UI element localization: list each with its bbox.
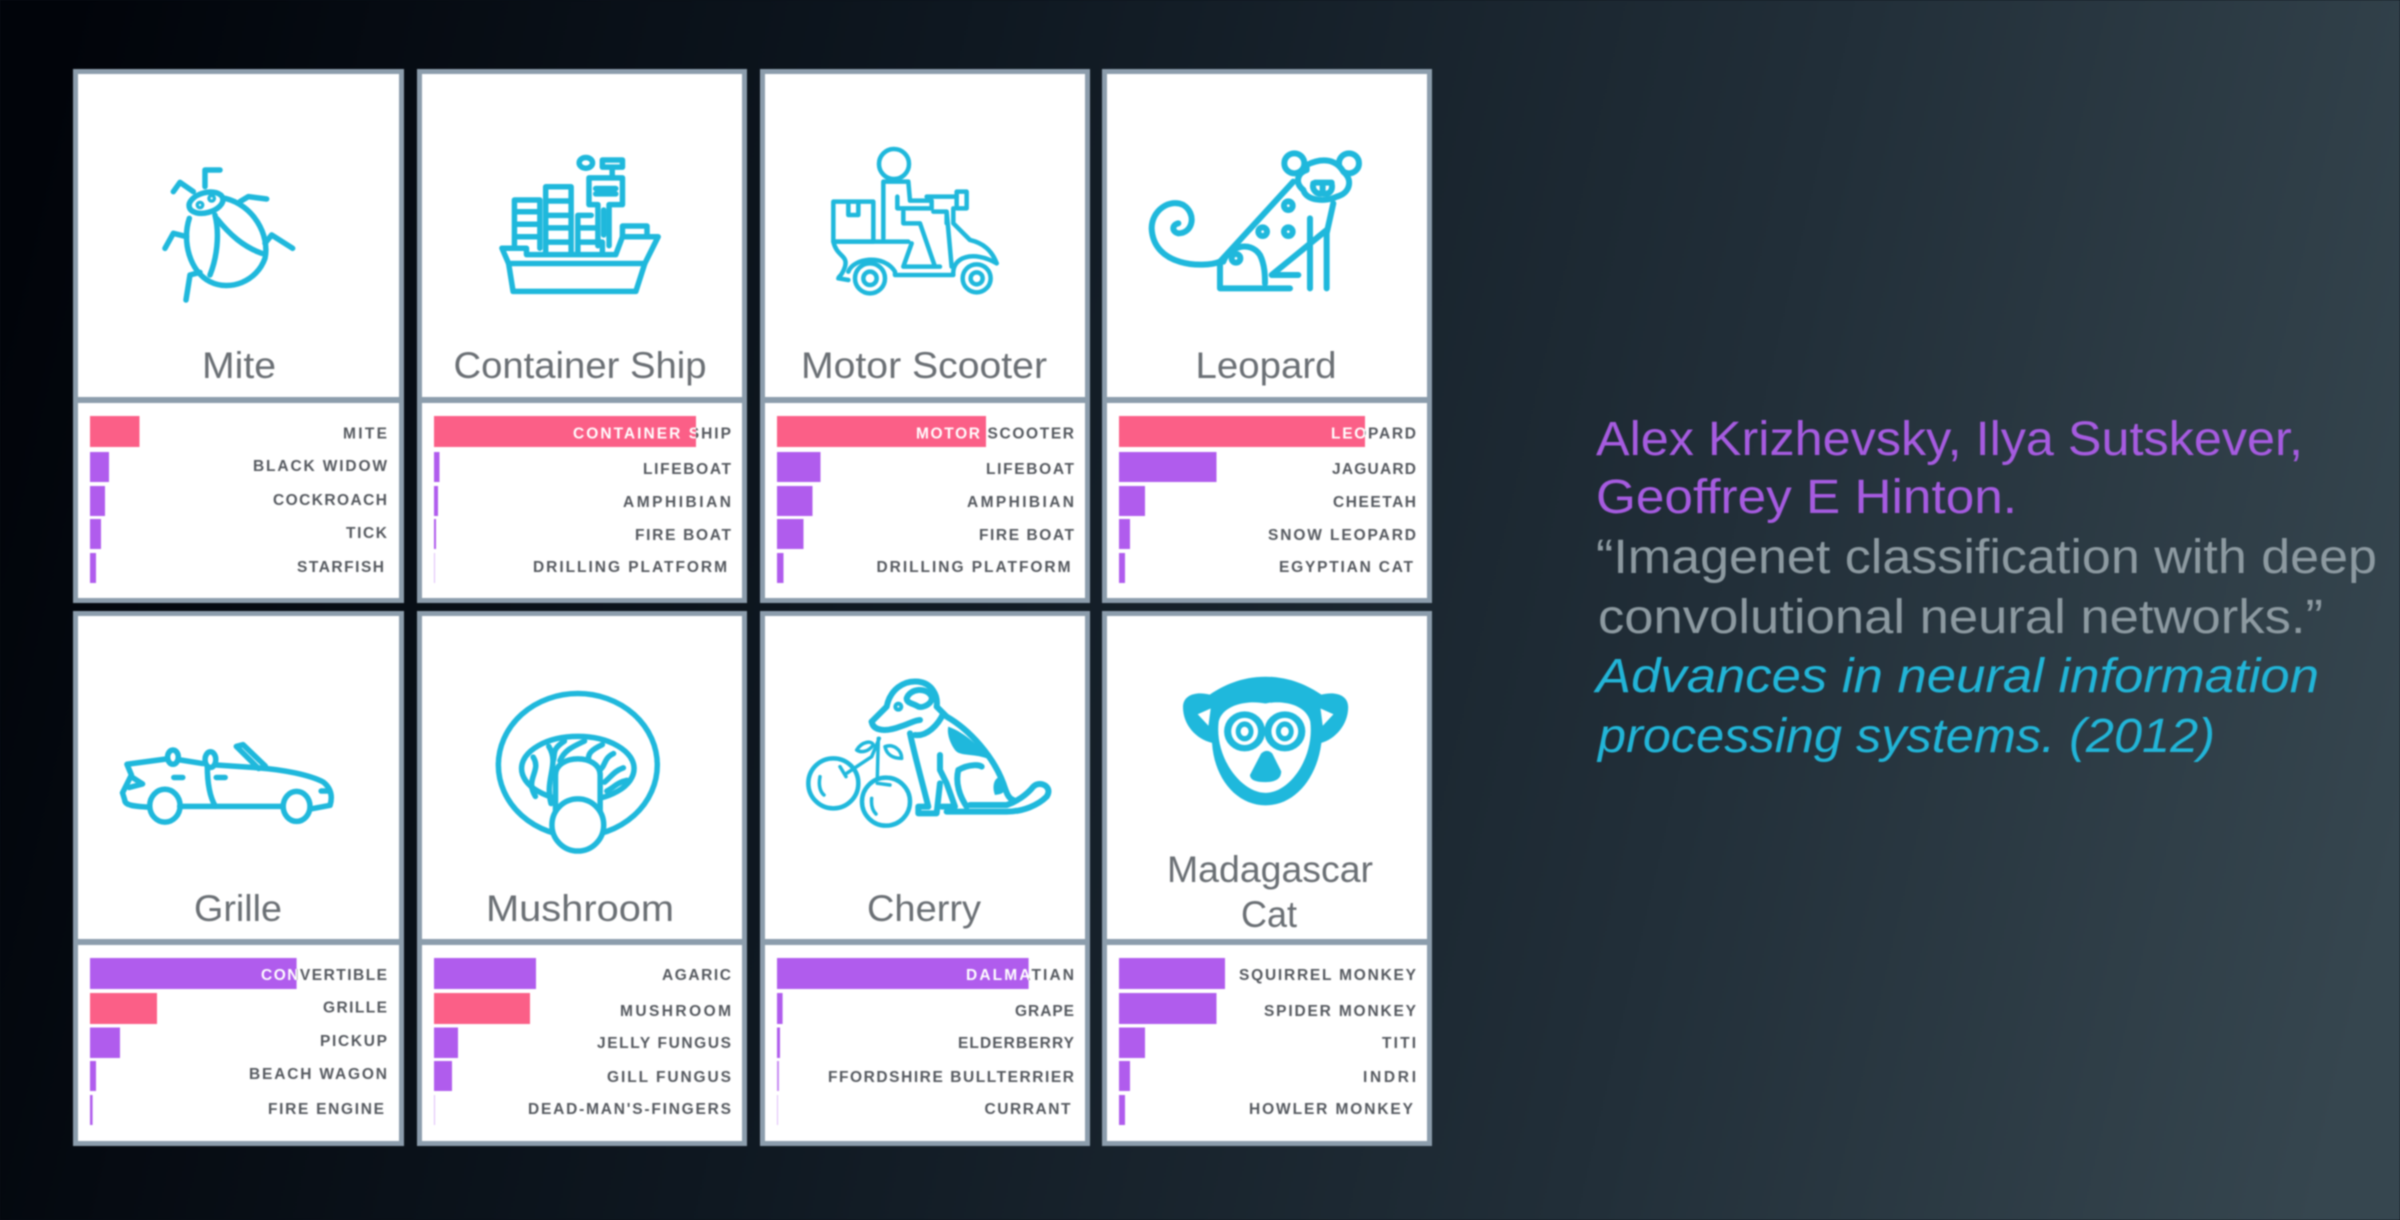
row: convertible: CONVERTIBLE (261, 967, 387, 984)
title: Container Ship: Container Ship (454, 345, 706, 386)
title: Leopard: Leopard (1196, 345, 1336, 386)
panel: Container Ship card (417, 69, 747, 603)
bar chart: Container Ship predictions (434, 416, 732, 583)
row: snow leopard (1119, 519, 1416, 549)
row: indri (1119, 1061, 1416, 1091)
row: lifeboat: LIFEBOAT (643, 461, 732, 478)
row: grape: GRAPE (1015, 1003, 1074, 1020)
row: amphibian (777, 486, 1074, 516)
row: tick: TICK (346, 525, 388, 542)
row: currant: CURRANT (984, 1101, 1071, 1118)
citation text block (1593, 413, 2377, 763)
row: beach wagon (90, 1061, 387, 1091)
card frame (760, 69, 1090, 603)
row: gill fungus: GILL FUNGUS (607, 1069, 731, 1086)
row: grille (90, 993, 387, 1024)
row: starfish (90, 553, 384, 583)
card frame (73, 611, 404, 1146)
title: Madagascar Cat: Cat (1241, 894, 1298, 935)
row: gill fungus (434, 1061, 731, 1091)
row: fire engine: FIRE ENGINE (268, 1101, 384, 1118)
bar chart: Mite predictions (90, 416, 388, 583)
row: jelly fungus: JELLY FUNGUS (597, 1035, 731, 1052)
row: cheetah (1119, 486, 1416, 516)
row: motor scooter: MOTOR SCOOTER (916, 426, 1074, 443)
row: beach wagon: BEACH WAGON (249, 1066, 387, 1083)
row: snow leopard: SNOW LEOPARD (1268, 527, 1416, 544)
row: squirrel monkey: SQUIRREL MONKEY (1239, 967, 1417, 984)
bar chart: Madagascar Cat predictions (1119, 958, 1417, 1125)
authors: Geoffrey E Hinton. (1596, 471, 2017, 524)
icon: dalmatian with cherries (808, 681, 1048, 826)
row: jelly fungus (434, 1028, 731, 1058)
card frame (1102, 69, 1432, 603)
row: cockroach: COCKROACH (273, 492, 387, 509)
row: egyptian cat: EGYPTIAN CAT (1279, 559, 1414, 576)
icon: container ship (502, 157, 658, 291)
row: lifeboat: LIFEBOAT (986, 461, 1075, 478)
title: Grille: Grille (194, 888, 282, 929)
row: elderberry: ELDERBERRY (958, 1035, 1075, 1052)
title: Madagascar Cat: Madagascar (1167, 849, 1373, 890)
row: mushroom: MUSHROOM (620, 1003, 731, 1020)
row: fire boat (777, 519, 1075, 549)
row: titi (1119, 1028, 1416, 1058)
row: howler monkey: HOWLER MONKEY (1249, 1101, 1414, 1118)
row: jaguard (1119, 452, 1416, 482)
publication venue: Advances in neural information (1593, 650, 2319, 703)
row: starfish: STARFISH (297, 559, 384, 576)
row: spider monkey: SPIDER MONKEY (1264, 1003, 1417, 1020)
row: fire boat: FIRE BOAT (979, 527, 1075, 544)
authors: Alex Krizhevsky, Ilya Sutskever, (1596, 413, 2303, 466)
row: mushroom (434, 993, 731, 1024)
panel: Motor Scooter card (760, 69, 1090, 603)
card frame (417, 69, 747, 603)
row: lifeboat (434, 452, 732, 482)
icon: mite (165, 170, 293, 300)
row: indri: INDRI (1363, 1069, 1416, 1086)
row: grille: GRILLE (323, 1000, 387, 1016)
paper title: “Imagenet classification with deep (1596, 531, 2377, 584)
bar chart: Mushroom predictions (434, 958, 731, 1125)
row: container ship: CONTAINER SHIP (573, 426, 731, 443)
paper title: convolutional neural networks.” (1598, 591, 2323, 644)
row: dead-man's-fingers: DEAD-MAN'S-FINGERS (528, 1101, 731, 1118)
row: black widow (90, 452, 387, 482)
row: pickup: PICKUP (320, 1033, 387, 1050)
row: black widow: BLACK WIDOW (253, 458, 387, 475)
row: fire boat: FIRE BOAT (635, 527, 732, 544)
row: jaguard: JAGUARD (1332, 461, 1416, 478)
panel: Mushroom card (417, 611, 747, 1146)
row: amphibian (434, 486, 731, 516)
panel: Madagascar Cat card (1102, 611, 1432, 1146)
card frame (760, 611, 1090, 1146)
row: staffordshire bullterrier: FFORDSHIRE BULLTERRIER (828, 1069, 1074, 1086)
card frame (1102, 611, 1432, 1146)
row: elderberry (777, 1028, 1075, 1058)
icon: lemur face (1183, 677, 1348, 805)
row: spider monkey (1119, 993, 1417, 1024)
title: Mite: Mite (202, 345, 276, 386)
row: mite: MITE (343, 426, 387, 443)
row: leopard (1119, 416, 1416, 447)
row: agaric: AGARIC (662, 967, 731, 984)
row: squirrel monkey (1119, 958, 1417, 989)
card frame (73, 69, 404, 603)
row: drilling platform: DRILLING PLATFORM (876, 559, 1070, 576)
publication venue: processing systems. (2012) (1596, 710, 2215, 763)
authors (1596, 413, 2303, 524)
icon: convertible car (122, 745, 331, 822)
panel: Cherry card (760, 611, 1090, 1146)
card frame (417, 611, 747, 1146)
publication venue (1593, 650, 2319, 763)
bar chart: Grille predictions (90, 958, 387, 1125)
icon: leopard (1152, 153, 1359, 288)
title: Cherry: Cherry (867, 888, 981, 929)
row: leopard: LEOPARD (1331, 426, 1416, 443)
panel: Mite card (73, 69, 404, 603)
row: titi: TITI (1382, 1035, 1416, 1052)
title: Madagascar Cat (1167, 849, 1373, 935)
row: tick (90, 519, 388, 549)
title: Mushroom: Mushroom (486, 888, 674, 929)
row: drilling platform (777, 553, 1070, 583)
bar chart: Cherry predictions (777, 958, 1075, 1125)
icon: mushroom (498, 694, 657, 851)
row: agaric (434, 958, 731, 989)
bar chart: Leopard predictions (1119, 416, 1416, 583)
row: howler monkey (1119, 1095, 1414, 1125)
row: cheetah: CHEETAH (1333, 494, 1416, 511)
row: cockroach (90, 486, 387, 516)
row: container ship (434, 416, 731, 447)
row: dalmatian (777, 958, 1074, 989)
panel: Grille card (73, 611, 404, 1146)
row: dalmatian: DALMATIAN (966, 967, 1074, 984)
bar chart: Motor Scooter predictions (777, 416, 1075, 583)
row: amphibian: AMPHIBIAN (623, 494, 731, 511)
row: pickup (90, 1028, 387, 1058)
icon: motor scooter (833, 149, 997, 293)
title: Motor Scooter: Motor Scooter (801, 345, 1047, 386)
row: amphibian: AMPHIBIAN (967, 494, 1074, 511)
row: egyptian cat (1119, 553, 1414, 583)
row: convertible (90, 958, 387, 989)
row: grape (777, 993, 1074, 1024)
row: motor scooter (777, 416, 1074, 447)
row: mite (90, 416, 387, 447)
paper title (1596, 531, 2377, 644)
panel: Leopard card (1102, 69, 1432, 603)
row: lifeboat (777, 452, 1075, 482)
row: drilling platform: DRILLING PLATFORM (533, 559, 727, 576)
